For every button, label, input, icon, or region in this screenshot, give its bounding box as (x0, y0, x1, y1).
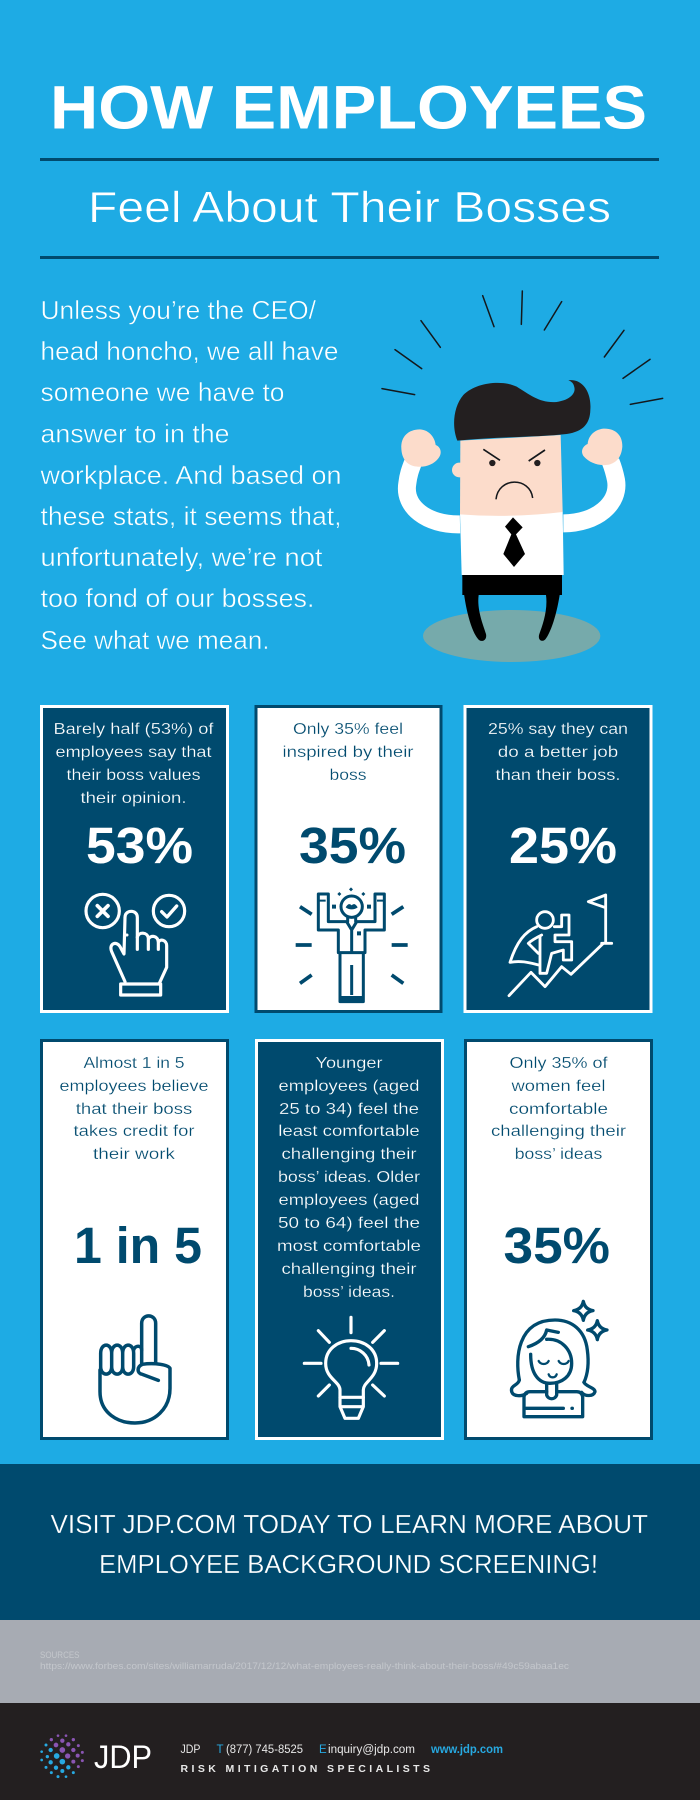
contact details: (877) 745-8525 (226, 1744, 303, 1756)
card 4 text: employees believe (60, 1078, 209, 1095)
card 2: 35 percent inspired (256, 706, 441, 1012)
contact details: inquiry@jdp.com (328, 1744, 415, 1756)
tagline: RISK MITIGATION SPECIALISTS (180, 1763, 430, 1775)
card 6 text: Only 35% of (510, 1055, 608, 1072)
card 1 text: their opinion. (80, 790, 186, 807)
stat: 1 in 5: 1 in 5 (74, 1217, 202, 1274)
card 4 text: their work (93, 1146, 176, 1163)
illustration: angry boss (382, 291, 663, 662)
call to action text (50, 1511, 648, 1579)
card 5 text: 50 to 64) feel the (278, 1215, 420, 1232)
card 5 text: 25 to 34) feel the (279, 1101, 419, 1118)
footer band (0, 1703, 700, 1800)
card 3 text: 25% say they can (488, 721, 628, 738)
icon: pointing hand with choices (86, 894, 185, 995)
card 6: women challenging ideas (466, 1040, 652, 1438)
card 2 text: boss (330, 767, 366, 784)
icon: light bulb (304, 1317, 398, 1418)
sources text: https://www.forbes.com/sites/williamarruda/2017/12/12/what-employees-really-think-about-their-boss/#49c59abaa1ec (40, 1661, 569, 1672)
sources text (40, 1650, 569, 1672)
logo wordmark: JDP (94, 1739, 152, 1775)
card 3 text: do a better job (498, 744, 618, 761)
card 1: 53 percent (42, 706, 228, 1012)
intro paragraph: workplace. And based on (39, 460, 342, 490)
card 5 text: employees (aged (278, 1192, 420, 1209)
icon: one finger hand (100, 1316, 170, 1423)
card 5 text: boss’ ideas. (303, 1284, 395, 1301)
icon: inspired person (296, 887, 408, 1002)
stat: 35% of women: 35% (504, 1217, 610, 1274)
logo: JDP dots mark (40, 1734, 84, 1778)
icon: woman with sparkles (511, 1301, 607, 1417)
card 1 text: their boss values (66, 767, 200, 784)
card 5 text: challenging their (282, 1146, 417, 1163)
contact details: JDP (180, 1744, 201, 1756)
card 5: younger vs older employees (256, 1040, 442, 1438)
icon: caped climber with flag (509, 895, 612, 996)
intro paragraph: answer to in the (40, 418, 230, 448)
intro paragraph: someone we have to (40, 377, 284, 407)
card 4 text (60, 1055, 209, 1163)
card 6 text: women feel (510, 1078, 606, 1095)
card 5 text: Younger (316, 1055, 383, 1072)
contact details (180, 1744, 503, 1756)
card 1 text: Barely half (53%) of (54, 721, 214, 738)
stat: 53%: 53% (86, 817, 193, 874)
card 3 text: than their boss. (496, 767, 620, 784)
card 4: 1 in 5 (42, 1040, 228, 1438)
card 2 text: Only 35% feel (293, 721, 403, 738)
contact details: E (319, 1744, 327, 1756)
card 5 text (277, 1055, 421, 1301)
stat: 25%: 25% (509, 817, 617, 874)
call to action text: EMPLOYEE BACKGROUND SCREENING! (99, 1551, 598, 1579)
intro paragraph: head honcho, we all have (40, 336, 338, 366)
subtitle: Feel About Their Bosses (88, 183, 611, 232)
card 6 text (491, 1055, 627, 1163)
intro paragraph: Unless you’re the CEO/ (40, 295, 317, 325)
card 5 text: most comfortable (277, 1238, 421, 1255)
call to action text: VISIT JDP.COM TODAY TO LEARN MORE ABOUT (50, 1511, 648, 1539)
card 5 text: least comfortable (278, 1123, 420, 1140)
card 1 text (54, 721, 214, 807)
intro paragraph: these stats, it seems that, (40, 501, 342, 531)
contact details: www.jdp.com (430, 1744, 503, 1756)
contact details: T (216, 1744, 224, 1756)
title: HOW EMPLOYEES (50, 74, 647, 142)
call to action band (0, 1464, 700, 1620)
card 1 text: employees say that (56, 744, 212, 761)
card 6 text: comfortable (509, 1101, 608, 1118)
card 4 text: takes credit for (74, 1123, 195, 1140)
card 2 text (282, 721, 414, 784)
intro paragraph: unfortunately, we’re not (40, 542, 323, 572)
card 5 text: employees (aged (278, 1078, 420, 1095)
intro paragraph: See what we mean. (40, 625, 270, 655)
card 3: 25 percent (465, 706, 651, 1012)
card 5 text: challenging their (282, 1261, 417, 1278)
stat: 35%: 35% (299, 817, 406, 874)
intro paragraph (39, 295, 342, 655)
sources text: SOURCES (40, 1650, 80, 1661)
card 5 text: boss’ ideas. Older (278, 1169, 421, 1186)
card 4 text: that their boss (76, 1101, 192, 1118)
intro paragraph: too fond of our bosses. (40, 583, 314, 613)
card 3 text (488, 721, 628, 784)
card 6 text: challenging their (491, 1123, 627, 1140)
card 6 text: boss’ ideas (515, 1146, 602, 1163)
sources band (0, 1620, 700, 1703)
card 4 text: Almost 1 in 5 (84, 1055, 185, 1072)
card 2 text: inspired by their (282, 744, 414, 761)
